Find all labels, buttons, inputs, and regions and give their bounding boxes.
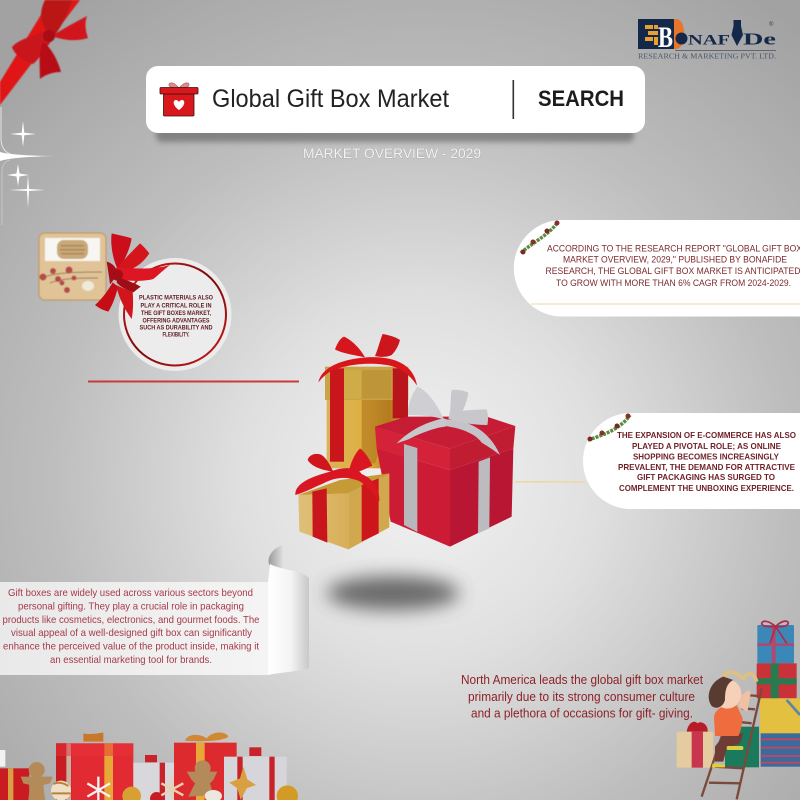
banner curl — [268, 545, 284, 571]
scroll banner — [0, 545, 309, 675]
text: gift box sectors: an essential marketing tool for brands. — [50, 655, 212, 666]
text: North America: North America leads the global gift box market — [461, 673, 703, 687]
logo: Bonafide — [638, 19, 777, 60]
big red box — [375, 387, 515, 547]
subtitle: MARKET OVERVIEW - 2029 — [303, 145, 481, 161]
text: plastic materials: PLASTIC MATERIALS ALSO — [139, 294, 213, 302]
icon: gift box with heart — [160, 83, 198, 116]
text: plastic materials: OFFERING ADVANTAGES — [142, 318, 210, 324]
divider line — [88, 380, 299, 382]
panel: research report callout — [514, 220, 800, 316]
text: report — [546, 242, 800, 288]
panel: e-commerce callout — [583, 413, 800, 509]
logo: Bonafide: RESEARCH & MARKETING PVT. LTD. — [638, 52, 776, 60]
text: North America: primarily due to its strong consumer culture — [468, 690, 695, 704]
text: e-commerce: PLAYED A PIVOTAL ROLE; AS ONLINE — [632, 441, 781, 451]
logo: Bonafide: De — [743, 30, 777, 48]
icon: garland — [588, 414, 630, 442]
search button label: SEARCH — [538, 86, 624, 111]
icon: garland — [520, 220, 560, 254]
ladder — [702, 688, 762, 799]
illustration: child on ladder with gifts — [677, 621, 800, 799]
child — [709, 672, 757, 767]
connector line — [515, 481, 585, 483]
text: e-commerce — [617, 430, 796, 493]
text: North America — [461, 673, 703, 720]
illustration: bottom gifts and gingerbread — [0, 732, 298, 800]
icon: wooden spa tray — [39, 233, 106, 300]
text: plastic materials — [139, 294, 213, 338]
icon: red bow — [95, 233, 170, 319]
panel: plastic materials circle — [118, 258, 232, 371]
stacked gifts — [677, 621, 800, 768]
sparkle decoration — [0, 107, 54, 225]
text: e-commerce: PREVALENT, THE DEMAND FOR ATTRACTIVE — [618, 462, 795, 472]
text: gift box sectors: personal gifting. They play a crucial role in packaging — [18, 602, 244, 612]
illustration: stacked gift boxes — [295, 334, 515, 549]
gold cylinder box — [318, 334, 417, 468]
text: gift box sectors: enhance the perceived value of the product inside, making it — [3, 642, 259, 652]
search query: Global Gift Box Market — [212, 85, 449, 113]
logo: Bonafide: ® — [769, 21, 774, 28]
text: plastic materials: FLEXIBILITY. — [162, 332, 190, 338]
logo: Bonafide: NAF — [688, 32, 730, 48]
search bar — [146, 66, 645, 142]
small gold box — [295, 448, 389, 549]
text: plastic materials: SUCH AS DURABILITY AND — [140, 324, 213, 332]
gingerbread figures — [21, 760, 217, 800]
text: gift box sectors: Gift boxes are widely used across various sectors beyond — [8, 588, 253, 599]
text: e-commerce: SHOPPING BECOMES INCREASINGLY — [633, 452, 779, 462]
ribbon with bow, top left — [0, 0, 88, 105]
text: gift box sectors: products like cosmetics, electronics, and gourmet foods. The — [2, 615, 260, 626]
text: gift box sectors — [2, 588, 260, 666]
text: gift box sectors: visual appeal of a well-designed gift box can significantly — [11, 628, 253, 639]
logo: Bonafide: B — [658, 21, 673, 54]
drop shadow under gifts — [327, 576, 459, 610]
text: plastic materials: PLAY A CRITICAL ROLE IN — [140, 302, 212, 310]
text: e-commerce: GIFT PACKAGING HAS SURGED TO — [637, 472, 775, 482]
text: plastic materials: THE GIFT BOXES MARKET, — [141, 310, 211, 317]
text: North America: and a plethora of occasions for gift- giving. — [471, 706, 693, 720]
